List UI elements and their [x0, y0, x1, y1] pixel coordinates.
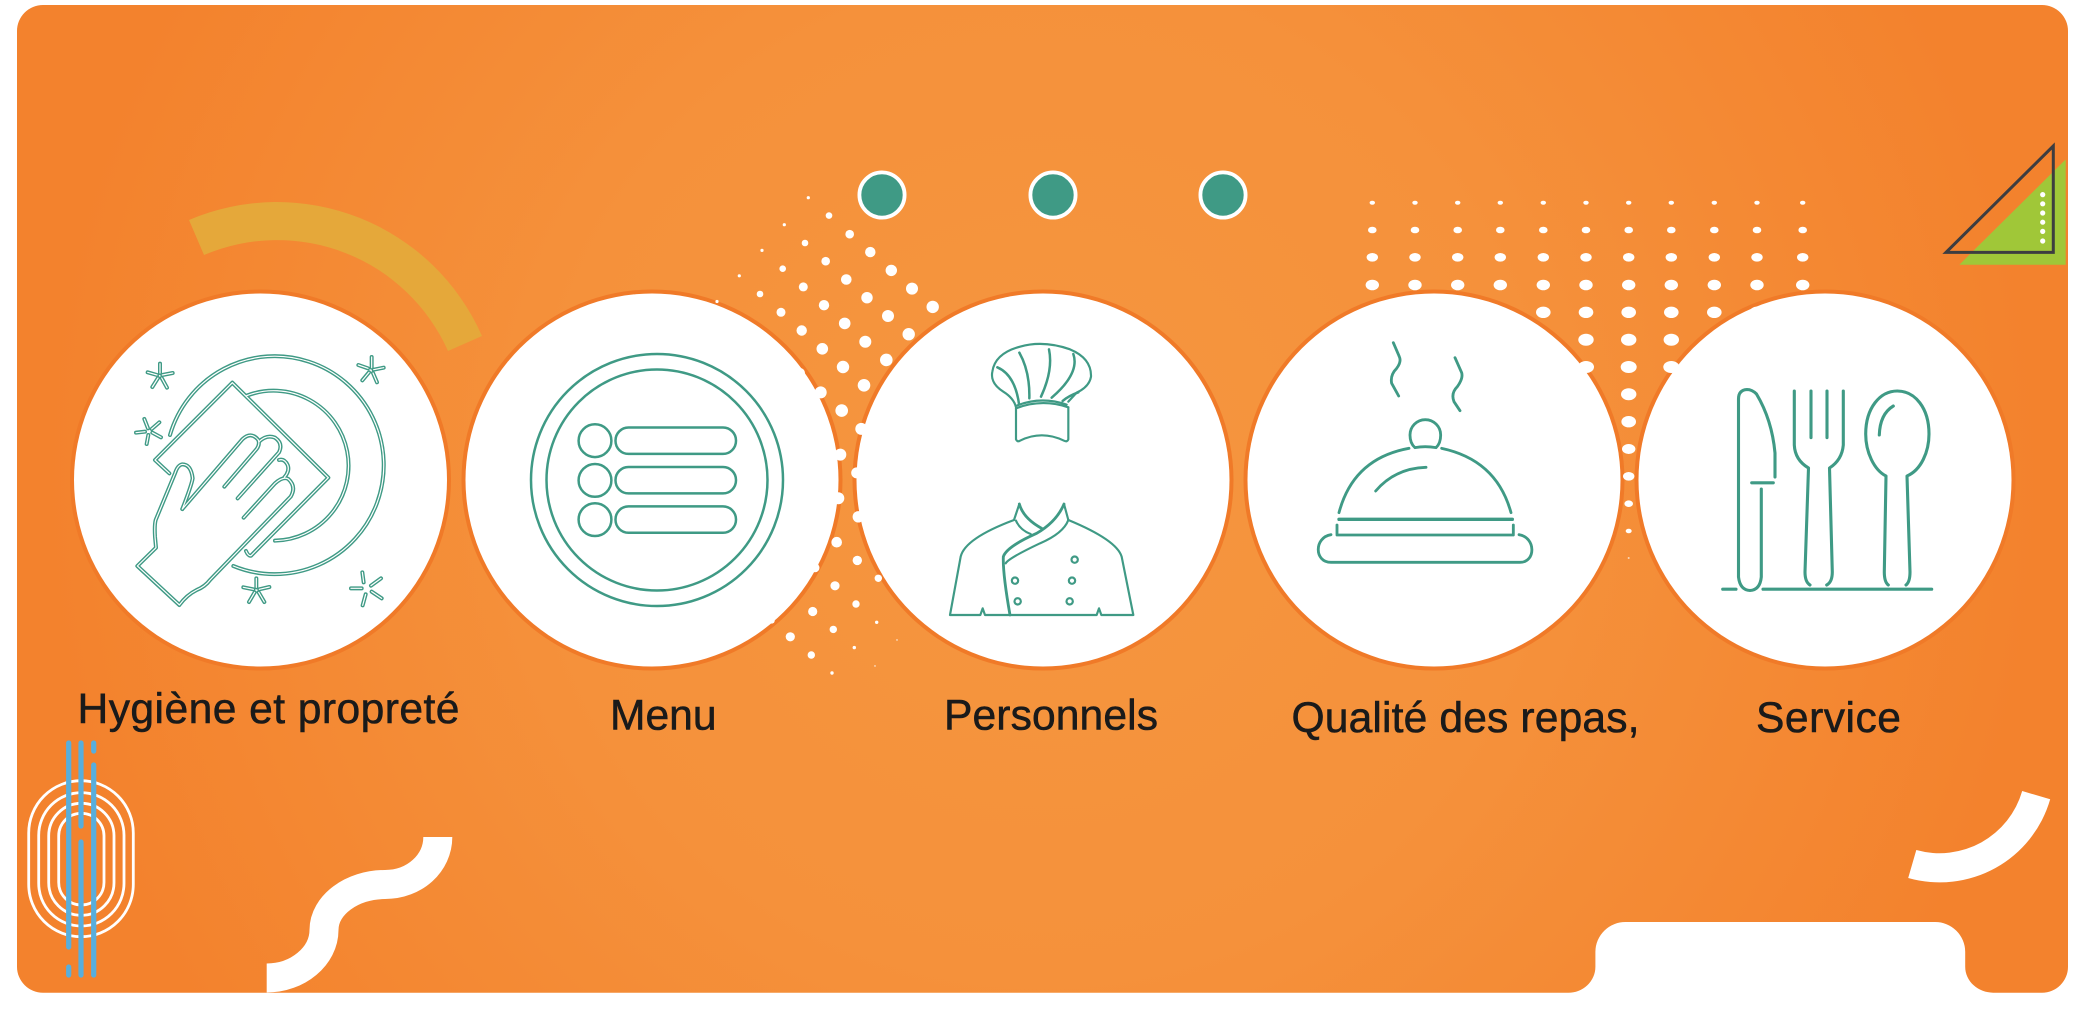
triangle decoration [1946, 146, 2066, 265]
icon: menu plate [531, 354, 783, 606]
icon: hand wiping plate [136, 356, 384, 605]
white arc bottom right [1908, 791, 2050, 882]
halftone dots: funnel grid [1366, 201, 1809, 559]
white S-curve [267, 837, 438, 978]
circle outer rings [70, 290, 2016, 670]
icon: serving cloche with steam [1318, 343, 1532, 562]
label: Hygiène et propreté: Hygiène et propreté [78, 685, 460, 733]
white circles [74, 294, 2012, 666]
label: Service: Service [1756, 694, 1901, 742]
label: Qualité des repas: Qualité des repas, [1292, 694, 1640, 742]
concentric rings with blue lines [29, 743, 133, 975]
gold arc decoration [189, 202, 482, 351]
icon: chef hat and jacket [950, 344, 1133, 615]
icon: knife fork and spoon [1723, 390, 1932, 590]
halftone dots: diamond cluster [715, 196, 939, 675]
three teal dots [859, 172, 1246, 218]
label: Menu: Menu [610, 692, 717, 740]
label: Personnels: Personnels [944, 692, 1158, 740]
